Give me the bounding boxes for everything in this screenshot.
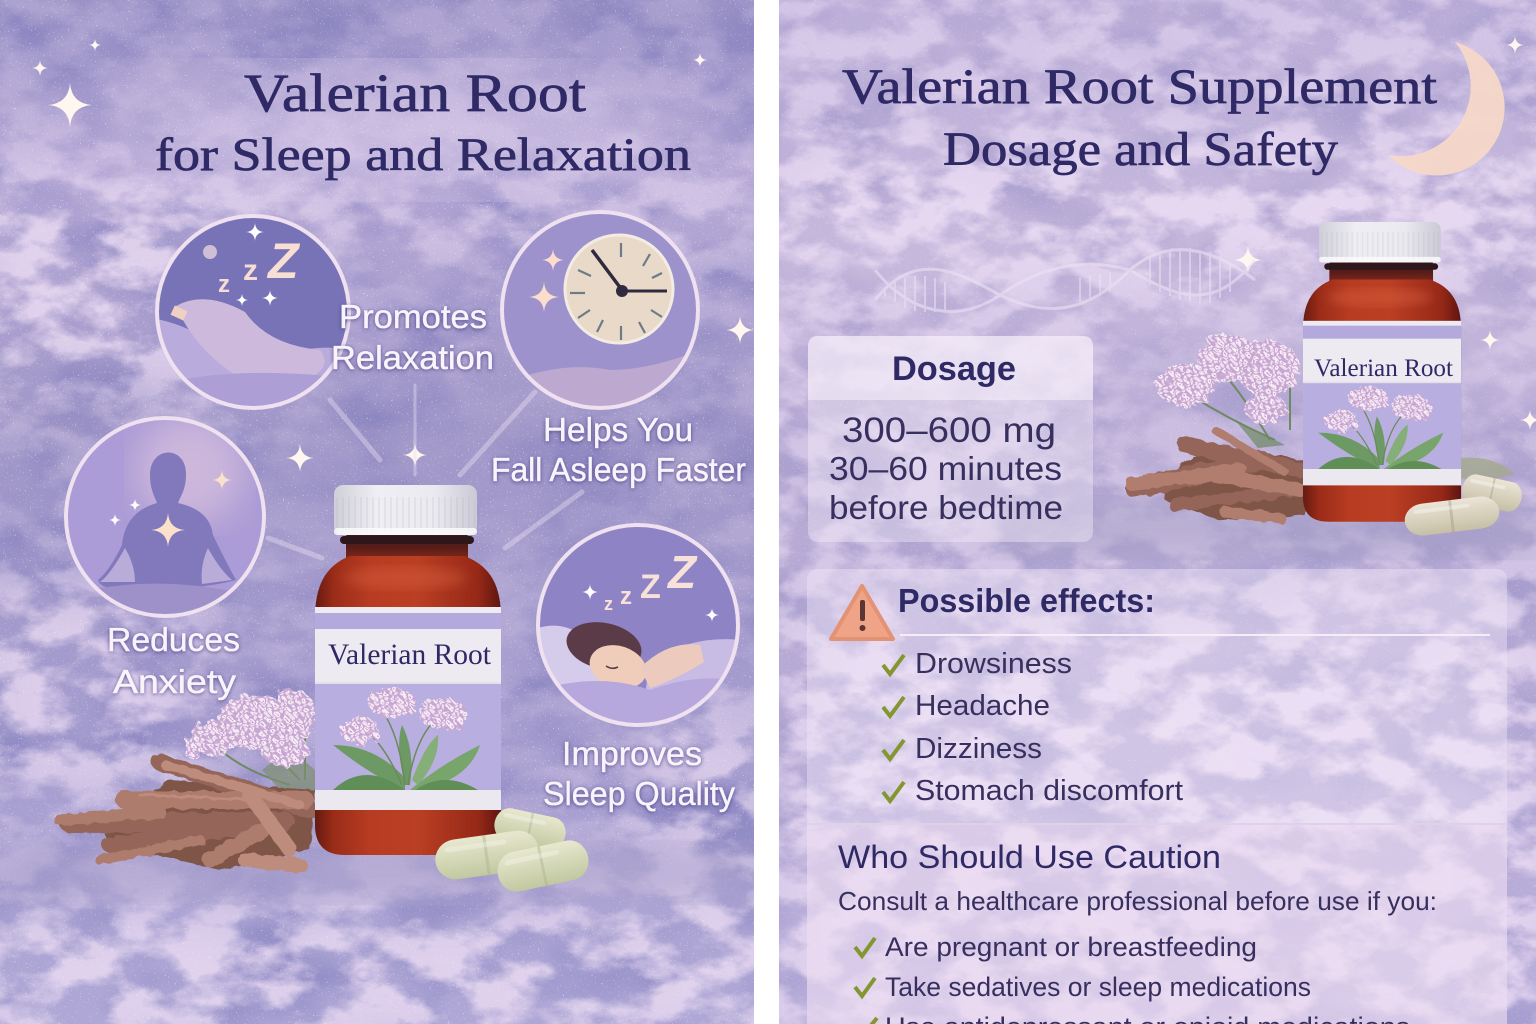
bottle: left: Valerian Root (328, 638, 492, 671)
bottle: right: Valerian Root (1314, 355, 1453, 382)
label: improves sleep quality (543, 735, 735, 812)
label: helps you fall asleep faster: Helps You (543, 411, 693, 448)
bottle: left (315, 485, 501, 855)
panel: possible effects and caution (807, 569, 1507, 1024)
title: right poster: Dosage and Safety (943, 123, 1338, 176)
title: left poster: Valerian Root (244, 63, 586, 123)
capsules: right (1403, 472, 1524, 538)
icon circle: improves sleep quality: Z (640, 568, 661, 606)
label: reduces anxiety (107, 621, 240, 700)
text: consult a professional: Consult a healthcare professional before use if you: (838, 886, 1437, 916)
title: right poster: Valerian Root Supplement (842, 58, 1437, 114)
list: caution groups: Take sedatives or sleep medications (885, 972, 1311, 1002)
panel: right poster background (779, 0, 1536, 1024)
panel: dosage card: Dosage (892, 350, 1016, 388)
dried valerian roots: left (60, 762, 315, 870)
list: side effects: Headache (915, 690, 1050, 722)
panel: dosage card: 300–600 mg (842, 411, 1056, 450)
title: left poster (155, 63, 691, 181)
icon circle: improves sleep quality: z (620, 583, 632, 610)
dried valerian roots: right (1132, 430, 1305, 520)
capsules: left (433, 805, 592, 895)
title: right poster (842, 58, 1437, 176)
label: reduces anxiety: Anxiety (113, 663, 237, 700)
icon circle: promotes relaxation: z (243, 254, 258, 287)
title: left poster: for Sleep and Relaxation (155, 129, 691, 181)
icon: DNA helix (875, 248, 1255, 312)
icon circle: promotes relaxation: Z (266, 233, 301, 289)
valerian flowers: left (183, 689, 316, 790)
icon circle: improves sleep quality: z (604, 594, 613, 614)
icon circle: reduces anxiety figure (66, 415, 264, 620)
connector lines from bottle to benefits (268, 385, 582, 558)
heading: who should use caution: Who Should Use Caution (838, 839, 1221, 875)
label: reduces anxiety: Reduces (107, 621, 240, 658)
sparkles (32, 39, 754, 472)
valerian flowers: right (1156, 334, 1300, 448)
list: side effects: Dizziness (915, 733, 1042, 765)
label: helps you fall asleep faster: Fall Asleep Faster (491, 451, 746, 488)
icon circle: improves sleep quality (538, 525, 740, 730)
list: caution groups: Are pregnant or breastfeeding (885, 932, 1257, 962)
panel: dosage card: before bedtime (829, 489, 1063, 526)
icon circle: improves sleep quality: Z (666, 546, 698, 598)
label: helps you fall asleep faster (491, 411, 746, 488)
leaf behind bottle: right (1460, 458, 1515, 480)
heading: possible effects: Possible effects: (898, 582, 1155, 619)
list: side effects: Drowsiness (915, 648, 1072, 680)
list: side effects (883, 648, 1183, 807)
panel: dosage card: 30–60 minutes (829, 450, 1062, 487)
label: promotes relaxation: Promotes (339, 298, 487, 335)
icon circle: fall asleep faster clock (500, 212, 700, 420)
label: improves sleep quality: Sleep Quality (543, 775, 735, 812)
panel: dosage card (808, 336, 1093, 542)
label: promotes relaxation (331, 298, 494, 376)
icon: warning triangle (831, 586, 893, 639)
icon circle: promotes relaxation (150, 216, 350, 420)
list: side effects: Stomach discomfort (915, 775, 1183, 807)
label: improves sleep quality: Improves (562, 735, 702, 772)
icon circle: promotes relaxation: z (218, 271, 230, 298)
icon: crescent moon (1388, 42, 1505, 175)
label: promotes relaxation: Relaxation (331, 339, 494, 376)
panel: left poster background (0, 0, 754, 1024)
list: caution groups (855, 932, 1410, 1024)
bottle: right (1303, 222, 1461, 522)
